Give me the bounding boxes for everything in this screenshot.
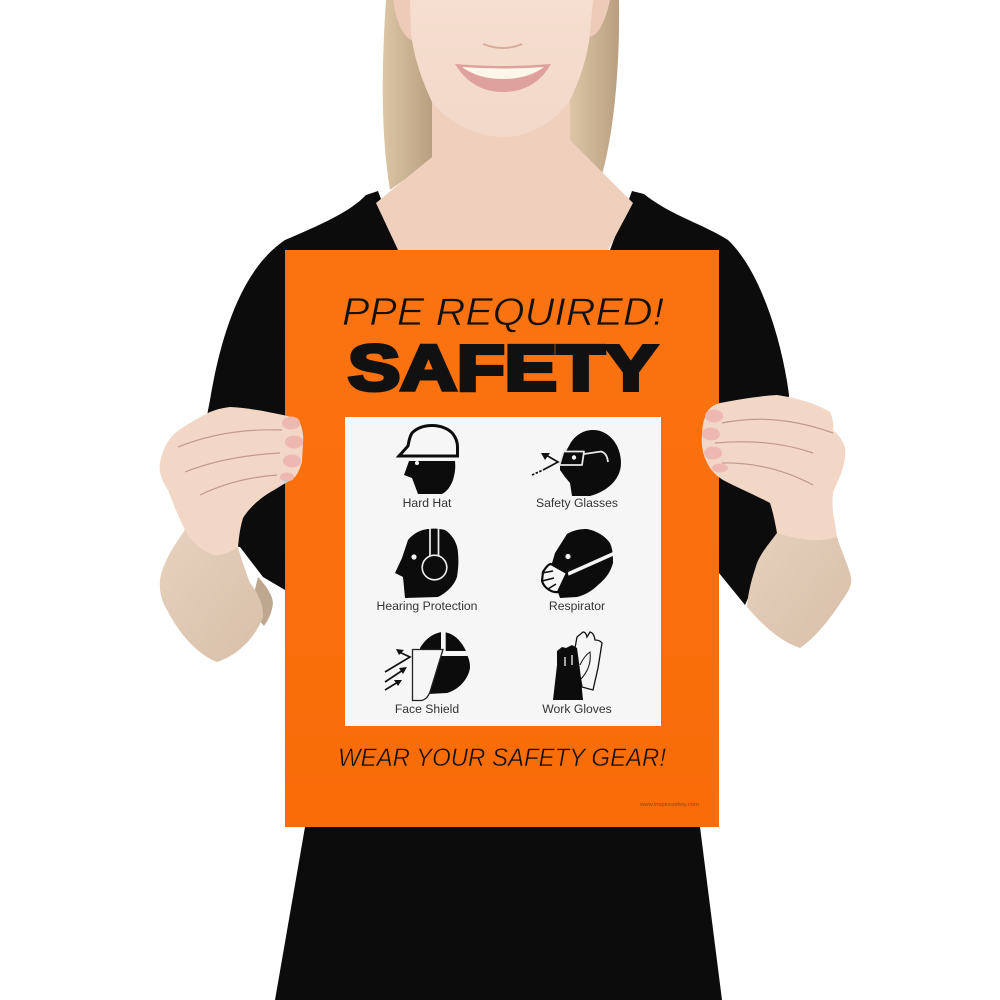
hair xyxy=(383,0,619,190)
website credit: www.inspiresafety.com xyxy=(639,802,699,808)
icon panel xyxy=(345,417,661,726)
icon: work gloves xyxy=(553,632,602,700)
icon: respirator xyxy=(542,529,614,598)
label: hearing protection: Hearing Protection xyxy=(377,599,477,613)
heading: Safety: SAFETY xyxy=(348,332,657,404)
panel background xyxy=(345,417,661,726)
person behind the poster xyxy=(160,0,851,1000)
right forearm xyxy=(747,513,851,648)
label: respirator: Respirator xyxy=(549,599,605,613)
left arm shadow xyxy=(250,577,273,626)
label: safety glasses: Safety Glasses xyxy=(536,496,618,510)
icon: hearing protection xyxy=(395,527,458,598)
right hand gripping the poster xyxy=(702,395,845,540)
left forearm xyxy=(160,530,263,662)
icon: safety glasses xyxy=(532,430,621,496)
slogan: WEAR YOUR SAFETY GEAR! xyxy=(338,744,666,772)
label: hard hat: Hard Hat xyxy=(403,496,452,510)
face xyxy=(410,0,593,137)
label: work gloves: Work Gloves xyxy=(542,702,612,716)
icon: hard hat xyxy=(399,426,458,494)
left hand gripping the poster xyxy=(160,407,303,555)
poster xyxy=(285,250,719,827)
heading: PPE required: PPE REQUIRED! xyxy=(342,291,664,334)
poster sheet xyxy=(285,250,719,827)
icon: face shield xyxy=(385,630,472,700)
black shirt and skirt xyxy=(183,191,789,1000)
nose shadow xyxy=(483,44,522,48)
label: face shield: Face Shield xyxy=(395,702,459,716)
mouth xyxy=(455,64,551,92)
neck and chest xyxy=(376,95,633,250)
ears xyxy=(393,0,610,42)
